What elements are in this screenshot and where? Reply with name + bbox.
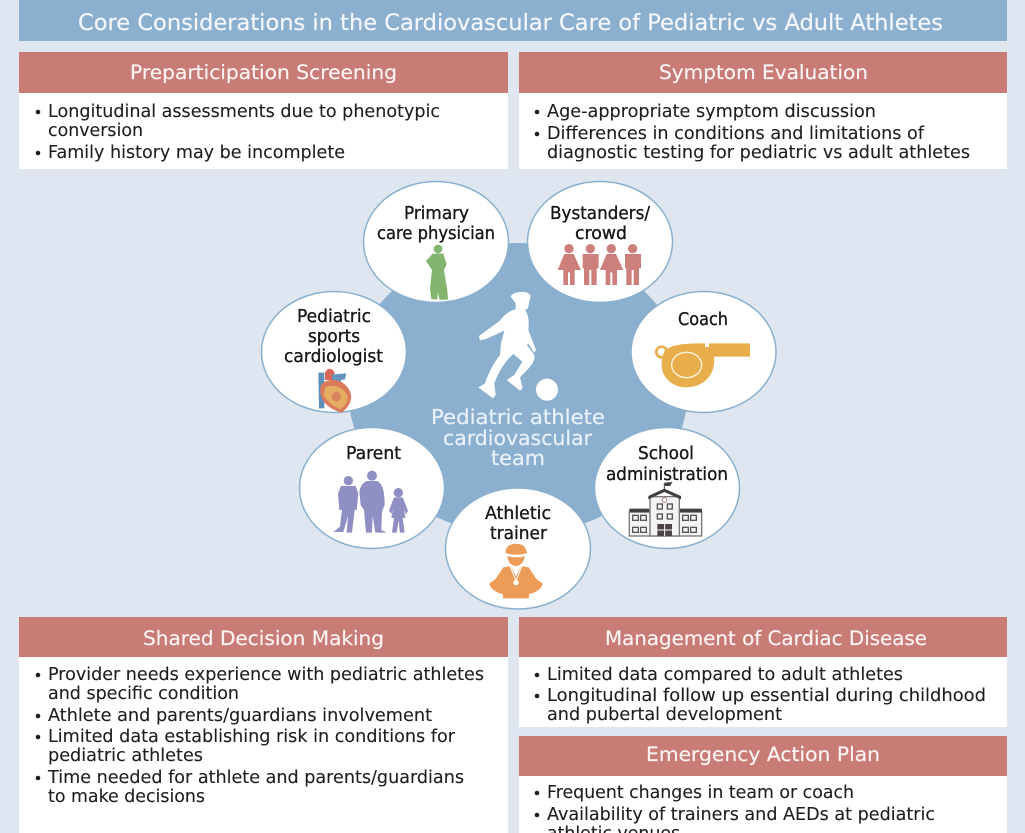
panel: preparticipation screening: conversion: [48, 120, 143, 141]
node: pediatric sports cardiologist: cardiologist: [284, 347, 383, 367]
panel: preparticipation screening: Preparticipation Screening: [130, 61, 397, 84]
icon: pediatric athlete with ball: [478, 292, 558, 401]
panel: shared decision making: Provider needs experience with pediatric athletes: [48, 664, 484, 685]
icon: crowd: [558, 244, 641, 285]
icon: family: [333, 471, 408, 533]
panel: shared decision making: to make decisions: [48, 786, 205, 807]
panel: shared decision making: Time needed for athlete and parents/guardians: [47, 767, 464, 788]
center label: Pediatric athlete: [431, 405, 605, 429]
node: coach: [631, 292, 776, 412]
node: pediatric sports cardiologist: sports: [308, 327, 360, 347]
panel: management of cardiac disease: Management of Cardiac Disease: [605, 627, 927, 650]
node: school administration: School: [638, 444, 694, 464]
title banner: Core Considerations in the Cardiovascular Care of Pediatric vs Adult Athletes: [78, 10, 943, 36]
panel: emergency action plan: Emergency Action Plan: [646, 743, 880, 766]
node: primary care physician: care physician: [377, 224, 495, 244]
panel: emergency action plan: [519, 736, 1007, 833]
node: athletic trainer: Athletic: [485, 504, 551, 524]
icon: physician: [426, 245, 448, 300]
node: pediatric sports cardiologist: Pediatric: [297, 307, 371, 327]
panel: symptom evaluation: [519, 52, 1007, 169]
node: athletic trainer: [446, 488, 590, 609]
panel: symptom evaluation: diagnostic testing for pediatric vs adult athletes: [547, 142, 970, 163]
panel: symptom evaluation: Symptom Evaluation: [659, 61, 868, 84]
node: primary care physician: [364, 182, 508, 302]
node: primary care physician: Primary: [404, 204, 469, 224]
panel: shared decision making: Athlete and parents/guardians involvement: [48, 705, 432, 726]
panel: shared decision making: Shared Decision Making: [143, 627, 384, 650]
panel: management of cardiac disease: Longitudinal follow up essential during childhood: [547, 685, 986, 706]
panel: management of cardiac disease: [519, 617, 1007, 727]
title banner: [19, 0, 1007, 41]
central team disc: [348, 243, 688, 535]
panel: symptom evaluation: Age-appropriate symptom discussion: [547, 101, 876, 122]
panel: emergency action plan: Availability of trainers and AEDs at pediatric: [547, 804, 935, 825]
panel: management of cardiac disease: Limited data compared to adult athletes: [547, 664, 903, 685]
panel: management of cardiac disease: and pubertal development: [547, 704, 782, 725]
node: athletic trainer: trainer: [490, 524, 548, 544]
node: pediatric sports cardiologist: [262, 292, 406, 413]
panel: preparticipation screening: Longitudinal assessments due to phenotypic: [48, 101, 440, 122]
node: coach: Coach: [678, 310, 728, 330]
panel: shared decision making: [19, 617, 508, 833]
node: bystanders / crowd: Bystanders/: [550, 204, 650, 224]
node: bystanders / crowd: [528, 182, 672, 302]
node: school administration: [594, 428, 740, 548]
center label: cardiovascular: [443, 426, 593, 450]
panel: shared decision making: pediatric athletes: [48, 745, 203, 766]
node: parent: Parent: [346, 444, 401, 464]
panel: preparticipation screening: [19, 52, 508, 169]
panel: shared decision making: and specific condition: [48, 683, 239, 704]
icon: heart: [318, 369, 351, 413]
panel: preparticipation screening: Family history may be incomplete: [48, 142, 345, 163]
icon: trainer: [489, 544, 543, 598]
center label: team: [491, 446, 545, 470]
panel: symptom evaluation: Differences in conditions and limitations of: [547, 123, 925, 144]
icon: school building: [629, 482, 702, 536]
panel: shared decision making: Limited data establishing risk in conditions for: [48, 726, 456, 747]
panel: emergency action plan: Frequent changes in team or coach: [547, 782, 854, 803]
node: bystanders / crowd: crowd: [575, 224, 627, 244]
node: school administration: administration: [606, 465, 728, 485]
icon: whistle: [656, 343, 750, 387]
node: parent: [300, 428, 444, 548]
center label: [431, 405, 605, 470]
